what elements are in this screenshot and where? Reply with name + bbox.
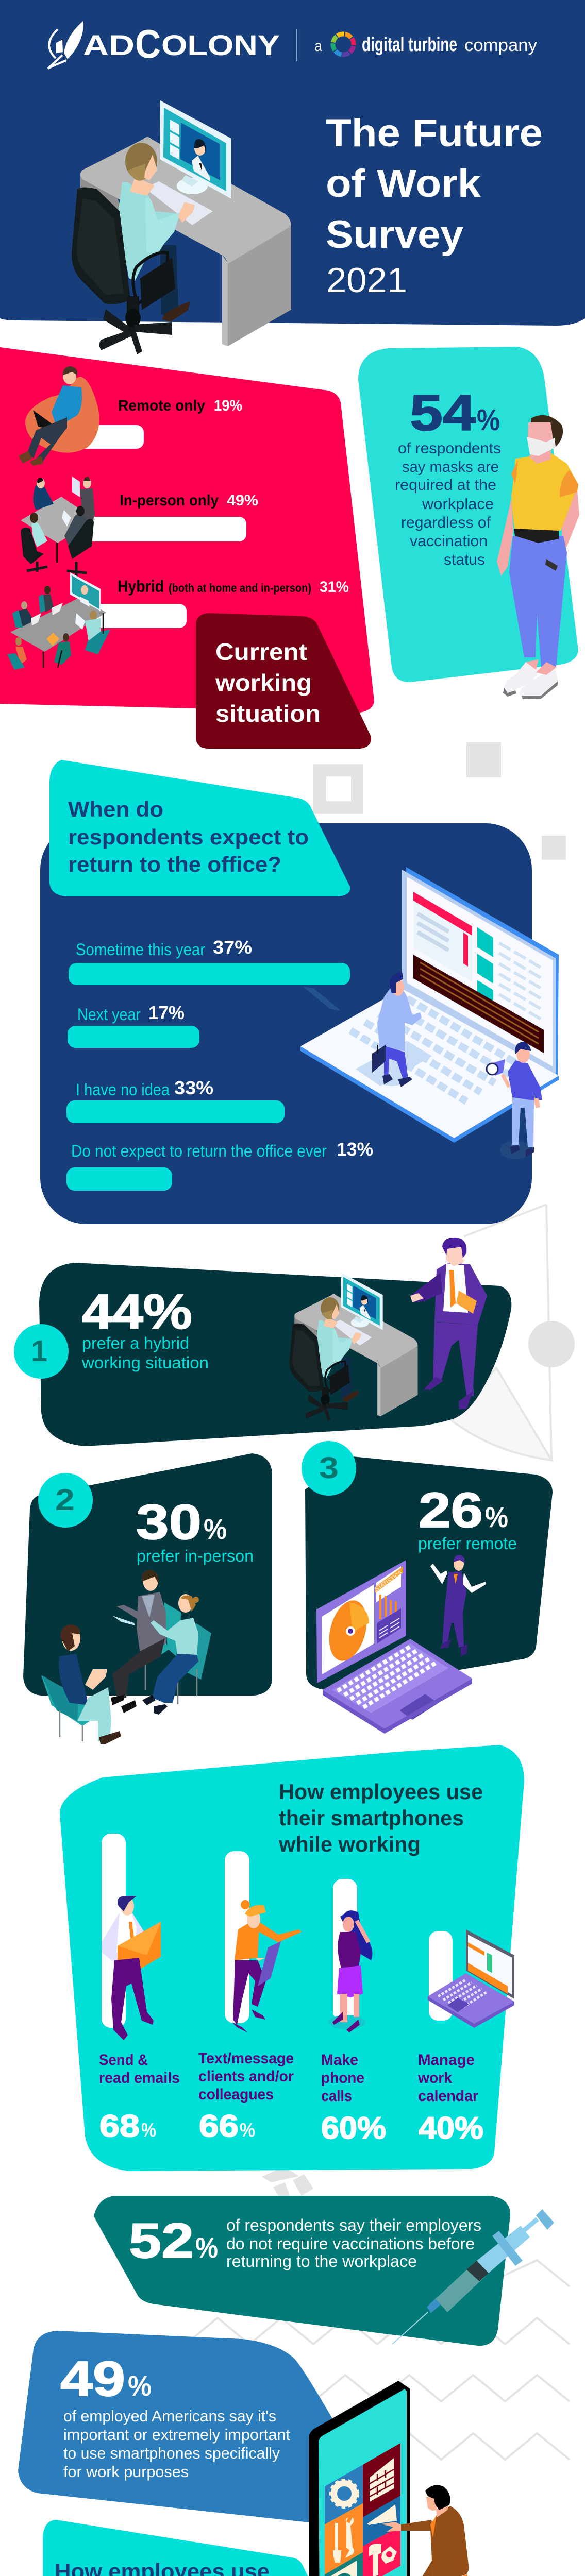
illustration: giant phone with man xyxy=(309,2381,469,2576)
bar: hybrid: 31% xyxy=(320,579,349,596)
panel: 52% vaccinations xyxy=(94,2196,554,2346)
text: masks: say masks are xyxy=(402,459,499,476)
title: 2021 xyxy=(326,261,407,300)
stat: 49%: % xyxy=(128,2369,152,2402)
logo: AdColony: OLONY xyxy=(161,29,280,61)
logo: digital turbine: digital turbine xyxy=(362,34,457,56)
illustration: giant laptop with two men xyxy=(300,867,559,1159)
text: masks: regardless of xyxy=(401,514,491,531)
heading tag: return to the office? xyxy=(68,852,281,876)
text: manage work calendar: calendar xyxy=(418,2088,478,2105)
bar: next year xyxy=(68,1002,199,1048)
text: masks xyxy=(395,440,501,568)
icon: syringe xyxy=(392,2209,554,2344)
illustration: man in purple suit xyxy=(410,1238,487,1409)
stat: 52% xyxy=(129,2213,218,2268)
text: manage work calendar: work xyxy=(417,2070,452,2087)
heading xyxy=(278,1780,483,1856)
bar: never xyxy=(66,1139,373,1191)
text: smartphones for work: for work purposes xyxy=(63,2463,189,2481)
text: masks: required at the xyxy=(395,477,496,494)
title: of Work xyxy=(326,162,481,206)
illustration: woman on phone xyxy=(328,1910,372,2032)
label: current working situation: working xyxy=(215,669,312,696)
panel: smartphones during breaks xyxy=(34,2381,525,2576)
bar: no idea: 33% xyxy=(174,1077,213,1098)
stat: 52%: 52 xyxy=(129,2213,194,2268)
logo: AdColony xyxy=(48,21,280,69)
text: masks: status xyxy=(444,551,485,568)
text: text/message clients: % xyxy=(240,2120,255,2141)
illustration: woman with mask xyxy=(497,415,579,699)
bar: in-person only xyxy=(88,492,258,541)
logo: digital turbine: company xyxy=(464,36,537,55)
panel: header xyxy=(0,0,585,354)
text: text/message clients: clients and/or xyxy=(198,2068,294,2085)
panel: 44% prefer hybrid xyxy=(14,1238,511,1446)
label: current working situation: situation xyxy=(215,700,321,727)
panel: current working situation xyxy=(0,347,374,749)
background decoration shapes xyxy=(0,742,585,2576)
heading tag xyxy=(49,760,350,896)
text: remote: prefer remote xyxy=(418,1534,517,1553)
stat: 49% xyxy=(60,2351,152,2406)
title: The Future xyxy=(326,111,543,155)
bar: hybrid: Hybrid xyxy=(118,577,164,596)
logo: AdColony: C xyxy=(135,21,161,66)
illustration: desk scene small xyxy=(289,1273,418,1421)
text: smartphones for work: of employed Americans say it's xyxy=(63,2407,276,2425)
stat: 26% xyxy=(419,1483,508,1538)
panel: smartphones while working xyxy=(60,1745,524,2171)
text: vaccinations: of respondents say their employers xyxy=(226,2216,481,2234)
stat: 52%: % xyxy=(195,2231,218,2264)
text: smartphones for work: to use smartphones specifically xyxy=(63,2444,280,2462)
bar: sometime this year xyxy=(69,937,350,985)
stat: 26%: % xyxy=(485,1501,508,1533)
text: vaccinations: do not require vaccinations before xyxy=(226,2234,475,2253)
bar: no idea: I have no idea xyxy=(76,1080,170,1099)
text: make phone calls: calls xyxy=(321,2088,352,2105)
heading: their smartphones xyxy=(279,1806,464,1830)
badge: 3 xyxy=(302,1441,356,1496)
text: send and read emails: Send & xyxy=(99,2052,148,2069)
bars xyxy=(102,1834,453,2028)
illustration: three people talking xyxy=(41,1570,211,1744)
bar: hybrid xyxy=(88,577,349,628)
illustration: man at desk on video call xyxy=(72,100,291,354)
text: manage work calendar: Manage xyxy=(418,2052,475,2069)
illustration: man on beanbag with laptop xyxy=(19,366,99,466)
text: text/message clients: Text/message xyxy=(198,2050,294,2067)
text: text/message clients xyxy=(198,2050,294,2143)
heading: while working xyxy=(278,1832,421,1856)
bar: no idea xyxy=(66,1077,285,1123)
illustration: purple laptop with presenter xyxy=(316,1555,486,1734)
bar: hybrid: (both at home and in-person) xyxy=(169,581,311,595)
text: hybrid: working situation xyxy=(81,1353,209,1372)
bar: remote only: 19% xyxy=(214,397,242,414)
text: send and read emails: % xyxy=(141,2120,156,2141)
illustration: in-person meeting xyxy=(21,477,95,576)
stat: 26%: 26 xyxy=(419,1483,483,1538)
logo: digital turbine: a xyxy=(314,38,322,55)
label: current working situation xyxy=(196,613,371,749)
label: current working situation: Current xyxy=(215,638,307,665)
text: vaccinations xyxy=(226,2216,481,2270)
stat: 49%: 49 xyxy=(60,2351,125,2406)
logo: digital turbine xyxy=(314,30,537,59)
heading tag: respondents expect to xyxy=(68,825,309,849)
text: smartphones for work: important or extremely important xyxy=(63,2426,290,2444)
divider xyxy=(296,29,297,61)
text: text/message clients: colleagues xyxy=(198,2086,274,2103)
bar: sometime this year: 37% xyxy=(213,937,252,958)
text: send and read emails xyxy=(99,2052,180,2143)
illustration: man with envelope xyxy=(102,1896,161,2040)
stat: 54%: 54 xyxy=(410,384,476,441)
illustration: woman with tablet xyxy=(232,1900,302,2032)
bar: remote only xyxy=(77,397,242,449)
title xyxy=(326,111,543,300)
text: send and read emails: 68 xyxy=(99,2109,140,2143)
text: manage work calendar: 40% xyxy=(419,2111,483,2145)
stat: 30%: % xyxy=(204,1513,227,1545)
illustration: purple laptop with presenter: STATISTICS xyxy=(374,1570,404,1592)
panel: 30% prefer in-person xyxy=(23,1453,272,1744)
text: make phone calls xyxy=(321,2052,386,2145)
badge: 2 xyxy=(38,1473,93,1528)
text: make phone calls: 60% xyxy=(321,2111,386,2145)
illustration: small laptop xyxy=(428,1929,514,2028)
bar: sometime this year: Sometime this year xyxy=(76,940,205,959)
text: make phone calls: Make xyxy=(321,2052,358,2069)
heading tag xyxy=(43,2520,343,2576)
text: masks: vaccination xyxy=(410,533,488,550)
bar: never: 13% xyxy=(337,1139,373,1160)
badge: 3: 3 xyxy=(319,1451,339,1485)
illustration: hybrid meeting xyxy=(7,572,110,670)
panel: return to office xyxy=(40,760,559,1224)
text: masks: of respondents xyxy=(398,440,501,457)
text: vaccinations: returning to the workplace xyxy=(226,2252,417,2270)
text: make phone calls: phone xyxy=(321,2070,364,2087)
bar: remote only: Remote only xyxy=(118,397,205,414)
bar: in-person only: 49% xyxy=(227,492,258,509)
stat: 54% xyxy=(410,384,500,441)
bar: next year: 17% xyxy=(148,1002,185,1023)
bar: never: Do not expect to return the office ever xyxy=(71,1142,327,1160)
stat: 54%: % xyxy=(477,403,500,437)
text: send and read emails: read emails xyxy=(99,2070,180,2087)
stat: 30% xyxy=(136,1495,227,1550)
bar: in-person only: In-person only xyxy=(120,492,219,509)
panel: 49% smartphones for work xyxy=(18,2331,332,2522)
logo: AdColony: AD xyxy=(83,29,135,61)
text: text/message clients: 66 xyxy=(199,2109,239,2143)
text: manage work calendar xyxy=(417,2052,483,2145)
text: hybrid xyxy=(81,1334,209,1372)
text: in-person: prefer in-person xyxy=(137,1547,254,1565)
text: masks: workplace xyxy=(422,496,494,513)
badge: 1: 1 xyxy=(31,1334,47,1368)
title: Survey xyxy=(326,213,463,257)
text: smartphones for work xyxy=(63,2407,290,2481)
badge: 1 xyxy=(14,1324,69,1379)
panel: 26% prefer remote xyxy=(302,1441,553,1734)
panel: 54% masks required xyxy=(358,347,579,699)
heading: How employees use xyxy=(279,1780,483,1804)
badge: 2: 2 xyxy=(55,1483,75,1517)
text: hybrid: prefer a hybrid xyxy=(82,1334,189,1352)
stat: 30%: 30 xyxy=(136,1495,202,1550)
stat: 44%: 44% xyxy=(82,1284,192,1340)
heading tag: When do xyxy=(68,797,163,821)
bar: next year: Next year xyxy=(77,1005,141,1024)
